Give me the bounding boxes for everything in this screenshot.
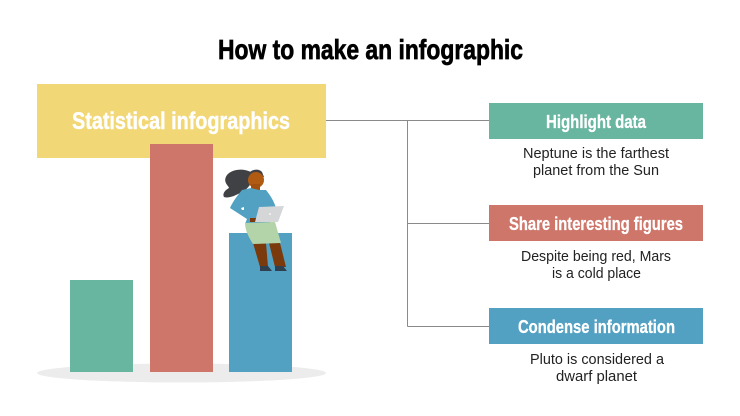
- title: How to make an infographic: [218, 34, 523, 65]
- panel: statistical infographics heading: Statistical infographics: [72, 108, 290, 135]
- connector lines: [326, 120, 489, 326]
- panel: highlight data: planet from the Sun: [533, 163, 659, 179]
- panel: share interesting figures: Share interesting figures: [509, 214, 683, 234]
- panel: condense information: [489, 308, 703, 385]
- panel: condense information: Pluto is considered a: [530, 352, 665, 368]
- panel: share interesting figures: Despite being red, Mars: [521, 249, 671, 265]
- icon: woman sitting with laptop: [223, 170, 287, 271]
- panel: share interesting figures: is a cold place: [552, 266, 641, 282]
- panel: share interesting figures: [489, 205, 703, 282]
- bar chart: [37, 144, 326, 382]
- panel: highlight data: Highlight data: [546, 112, 647, 132]
- panel: statistical infographics heading: [37, 84, 326, 158]
- panel: condense information: Condense information: [518, 317, 675, 337]
- panel: highlight data: Neptune is the farthest: [523, 146, 669, 162]
- panel: condense information: dwarf planet: [556, 369, 637, 385]
- panel: highlight data: [489, 103, 703, 179]
